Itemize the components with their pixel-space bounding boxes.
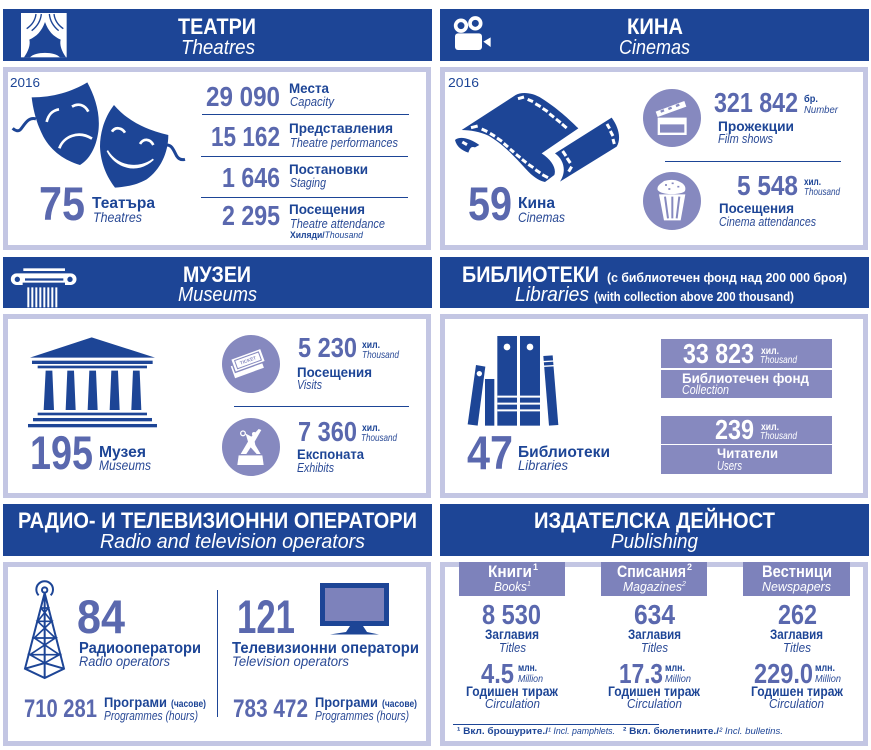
- column: magazines: 634: [634, 599, 675, 630]
- stat: capacity: [206, 80, 335, 112]
- stat: 195 museums: [30, 426, 151, 479]
- header: theatres: ТЕАТРИ: [178, 14, 256, 39]
- stat: film shows: Film shows: [718, 132, 773, 146]
- stat: staging: Staging: [290, 176, 326, 190]
- stat: film shows: Number: [804, 104, 838, 116]
- column: newspapers: 262: [778, 599, 817, 630]
- stat box: collection: Thousand: [760, 354, 798, 366]
- stat: 75 theatres: 75: [39, 177, 85, 230]
- stat: cinema attendances: Cinema attendances: [719, 215, 816, 229]
- column: books: Million: [518, 673, 543, 685]
- stat: film shows: бр.: [804, 93, 818, 105]
- stat: 195 museums: Музея: [99, 444, 146, 461]
- stat: exhibits: хил.: [362, 423, 380, 434]
- icon: books: [468, 336, 558, 426]
- stat: cinema attendances: 5 548: [737, 170, 798, 201]
- footnotes: ² Incl. bulletins.: [719, 726, 783, 737]
- column: newspapers: Вестници: [762, 562, 832, 581]
- stat: capacity: 29 090: [206, 81, 280, 112]
- stat: 75 theatres: Театъра: [92, 195, 155, 212]
- column: books: Годишен тираж: [466, 683, 559, 699]
- header: publishing: [440, 504, 869, 556]
- stat: attendance: Theatre attendance: [290, 217, 385, 231]
- header: museums: МУЗЕИ: [183, 262, 251, 287]
- stat: 75 theatres: [39, 177, 155, 230]
- stat: 47 libraries: 47: [467, 426, 513, 479]
- column: books: Titles: [499, 641, 526, 655]
- stat: capacity: Места: [289, 80, 329, 96]
- column: magazines: 2: [687, 562, 692, 572]
- header: museums: [3, 257, 432, 308]
- stat: attendance: Хиляди/Thousand: [290, 230, 364, 241]
- stat: attendance: [222, 200, 385, 241]
- icon: stage curtain: [21, 13, 67, 57]
- panel: radio and television operators: [3, 504, 432, 744]
- stat box: users: Thousand: [760, 430, 798, 442]
- stat: radio programmes: 710 281: [24, 695, 97, 723]
- frame: theatres: [6, 70, 428, 248]
- column: books: млн.: [518, 663, 537, 674]
- footnotes: [457, 726, 783, 737]
- stat: television operators: Television operators: [232, 653, 349, 669]
- stat: attendance: Посещения: [289, 201, 365, 217]
- icon: film camera: [455, 18, 491, 50]
- stat: staging: Постановки: [289, 161, 368, 177]
- year: 2016: [448, 75, 479, 90]
- stat: film shows: [714, 87, 838, 146]
- column: newspapers: млн.: [815, 663, 835, 674]
- header: radio and television: Radio and television operators: [100, 531, 365, 553]
- column: newspapers: Годишен тираж: [751, 683, 844, 699]
- footnotes: ² Вкл. бюлетините./: [623, 726, 719, 737]
- column: books: Книги: [488, 562, 532, 581]
- column: books: Заглавия: [485, 626, 539, 642]
- stat: visits: хил.: [362, 340, 380, 351]
- stat: radio operators: [77, 590, 201, 669]
- frame: libraries: [442, 316, 866, 496]
- stat: staging: [222, 161, 368, 193]
- stat: radio operators: 84: [77, 590, 125, 643]
- frame: museums: [6, 316, 428, 496]
- panel: theatres: [3, 9, 432, 248]
- header: libraries: (с библиотечен фонд над 200 000 броя): [607, 270, 847, 285]
- icon: clapperboard: [643, 89, 701, 147]
- column: books: 8 530: [482, 599, 541, 630]
- header: cinemas: КИНА: [627, 14, 683, 39]
- header: radio and television: РАДИО- И ТЕЛЕВИЗИОННИ ОПЕРАТОРИ: [18, 508, 417, 533]
- column: magazines: 17.3: [619, 658, 663, 689]
- stat: 47 libraries: [467, 426, 610, 479]
- stat box: collection: хил.: [761, 346, 779, 357]
- stat: visits: [297, 332, 400, 392]
- header: museums: Museums: [178, 284, 257, 306]
- stat: performances: Theatre performances: [290, 136, 398, 150]
- column: newspapers: Заглавия: [770, 626, 823, 642]
- column: magazines: Million: [665, 673, 691, 685]
- column: books: 4.5: [481, 658, 514, 689]
- stat: exhibits: Thousand: [361, 432, 398, 444]
- icon: film reel strip: [455, 93, 619, 182]
- icon: ionic column: [11, 268, 76, 307]
- header: publishing: Publishing: [611, 531, 698, 553]
- column: newspapers: Newspapers: [762, 579, 831, 594]
- stat: cinema attendances: хил.: [804, 177, 821, 188]
- column: magazines: Magazines: [623, 579, 682, 594]
- column: books: [459, 562, 565, 711]
- stat: 75 theatres: Theatres: [93, 209, 142, 225]
- header: cinemas: [440, 9, 869, 61]
- footnotes: ¹ Incl. pamphlets.: [548, 726, 615, 737]
- panel: cinemas: [440, 9, 869, 248]
- stat: 59 cinemas: 59: [468, 177, 512, 230]
- stat: radio programmes: (часове): [171, 699, 206, 710]
- panel: libraries: [440, 257, 869, 496]
- column: magazines: Circulation: [627, 697, 682, 711]
- stat: exhibits: [297, 416, 398, 475]
- stat: radio operators: Radio operators: [79, 653, 170, 669]
- stat: cinema attendances: Посещения: [719, 200, 794, 216]
- frame: radio and television: [6, 564, 428, 744]
- column: magazines: Годишен тираж: [608, 683, 701, 699]
- header: libraries: Libraries: [515, 284, 589, 306]
- stat: television operators: [232, 590, 419, 669]
- column: magazines: Списания: [617, 562, 686, 581]
- icon: tickets: [222, 335, 280, 393]
- header: publishing: ИЗДАТЕЛСКА ДЕЙНОСТ: [534, 508, 776, 533]
- stat box: collection: 33 823: [683, 338, 754, 369]
- stat box: users: Users: [717, 459, 742, 473]
- stat: television operators: Телевизионни оператори: [232, 640, 419, 657]
- stat: cinema attendances: [719, 170, 841, 229]
- column: books: 1: [527, 581, 531, 588]
- stat: radio programmes: Programmes (hours): [104, 709, 198, 723]
- header: cinemas: Cinemas: [619, 37, 690, 59]
- stat: exhibits: 7 360: [298, 416, 357, 447]
- column: newspapers: Circulation: [769, 697, 824, 711]
- icon: popcorn: [643, 172, 701, 230]
- header: libraries: [440, 257, 869, 308]
- stat box: users: 239: [715, 414, 754, 445]
- stat: exhibits: Exhibits: [297, 461, 334, 475]
- stat: radio programmes: [24, 694, 206, 723]
- stat: exhibits: Експоната: [297, 446, 364, 462]
- column: newspapers: Titles: [783, 641, 811, 655]
- stat: capacity: Capacity: [290, 95, 335, 109]
- stat: visits: 5 230: [298, 332, 357, 363]
- stat: visits: Посещения: [297, 364, 372, 380]
- stat: television programmes: [233, 694, 417, 723]
- column: newspapers: [743, 562, 850, 711]
- stat: radio programmes: Програми: [104, 694, 167, 710]
- column: magazines: Titles: [641, 641, 668, 655]
- header: theatres: Theatres: [181, 37, 255, 59]
- stat: television operators: 121: [237, 590, 295, 643]
- icon: theatre masks: [13, 82, 185, 188]
- column: books: Books: [494, 579, 527, 594]
- column: magazines: млн.: [665, 663, 685, 674]
- column: magazines: [601, 562, 707, 711]
- header: libraries: БИБЛИОТЕКИ: [462, 262, 599, 287]
- stat: visits: Visits: [297, 378, 322, 392]
- header: radio and television: [3, 504, 432, 556]
- year: 2016: [10, 75, 40, 90]
- stat: 47 libraries: Libraries: [518, 457, 568, 473]
- stat: 47 libraries: Библиотеки: [518, 444, 610, 461]
- panel: museums: [3, 257, 432, 496]
- icon: tickets: TICKET: [239, 355, 257, 366]
- stat box: users: Читатели: [717, 445, 778, 461]
- stat box: users: [661, 414, 832, 474]
- frame: publishing: [442, 564, 866, 744]
- icon: television: [320, 583, 389, 634]
- header: theatres: [3, 9, 432, 61]
- header: libraries: (with collection above 200 thousand): [594, 289, 794, 304]
- stat: 59 cinemas: Кина: [518, 195, 555, 212]
- column: books: 1: [533, 562, 538, 572]
- stat box: collection: Collection: [682, 383, 729, 397]
- stat: performances: [211, 120, 398, 152]
- stat: television programmes: Програми: [315, 694, 378, 710]
- stat box: users: хил.: [761, 422, 779, 433]
- stat: staging: 1 646: [222, 162, 280, 193]
- stat: cinema attendances: Thousand: [804, 186, 841, 198]
- stat: 59 cinemas: [468, 177, 565, 230]
- stat: radio operators: Радиооператори: [79, 640, 201, 657]
- stat: television programmes: Programmes (hours): [315, 709, 409, 723]
- footnotes: ¹ Вкл. брошурите./: [457, 726, 548, 737]
- column: magazines: Заглавия: [628, 626, 681, 642]
- column: newspapers: 229.0: [754, 658, 813, 689]
- stat box: collection: [661, 338, 832, 398]
- panel: publishing: [440, 504, 869, 744]
- stat: television programmes: (часове): [382, 699, 417, 710]
- stat: television programmes: 783 472: [233, 695, 308, 723]
- stat: visits: Thousand: [362, 349, 400, 361]
- stat: 195 museums: Museums: [99, 457, 151, 473]
- stat box: collection: Библиотечен фонд: [682, 370, 809, 386]
- column: newspapers: Million: [815, 673, 841, 685]
- icon: museum temple: [28, 337, 157, 427]
- icon: discus statue: [222, 418, 280, 476]
- icon: radio tower: [25, 581, 64, 678]
- stat: 59 cinemas: Cinemas: [518, 209, 565, 225]
- stat: film shows: Прожекции: [718, 118, 794, 134]
- stat: performances: Представления: [289, 120, 393, 136]
- frame: cinemas: [442, 70, 866, 248]
- column: magazines: 2: [681, 581, 686, 588]
- stat: performances: 15 162: [211, 121, 280, 152]
- stat: attendance: 2 295: [222, 200, 280, 231]
- stat: film shows: 321 842: [714, 87, 798, 118]
- stat: 195 museums: 195: [30, 426, 93, 479]
- column: books: Circulation: [485, 697, 540, 711]
